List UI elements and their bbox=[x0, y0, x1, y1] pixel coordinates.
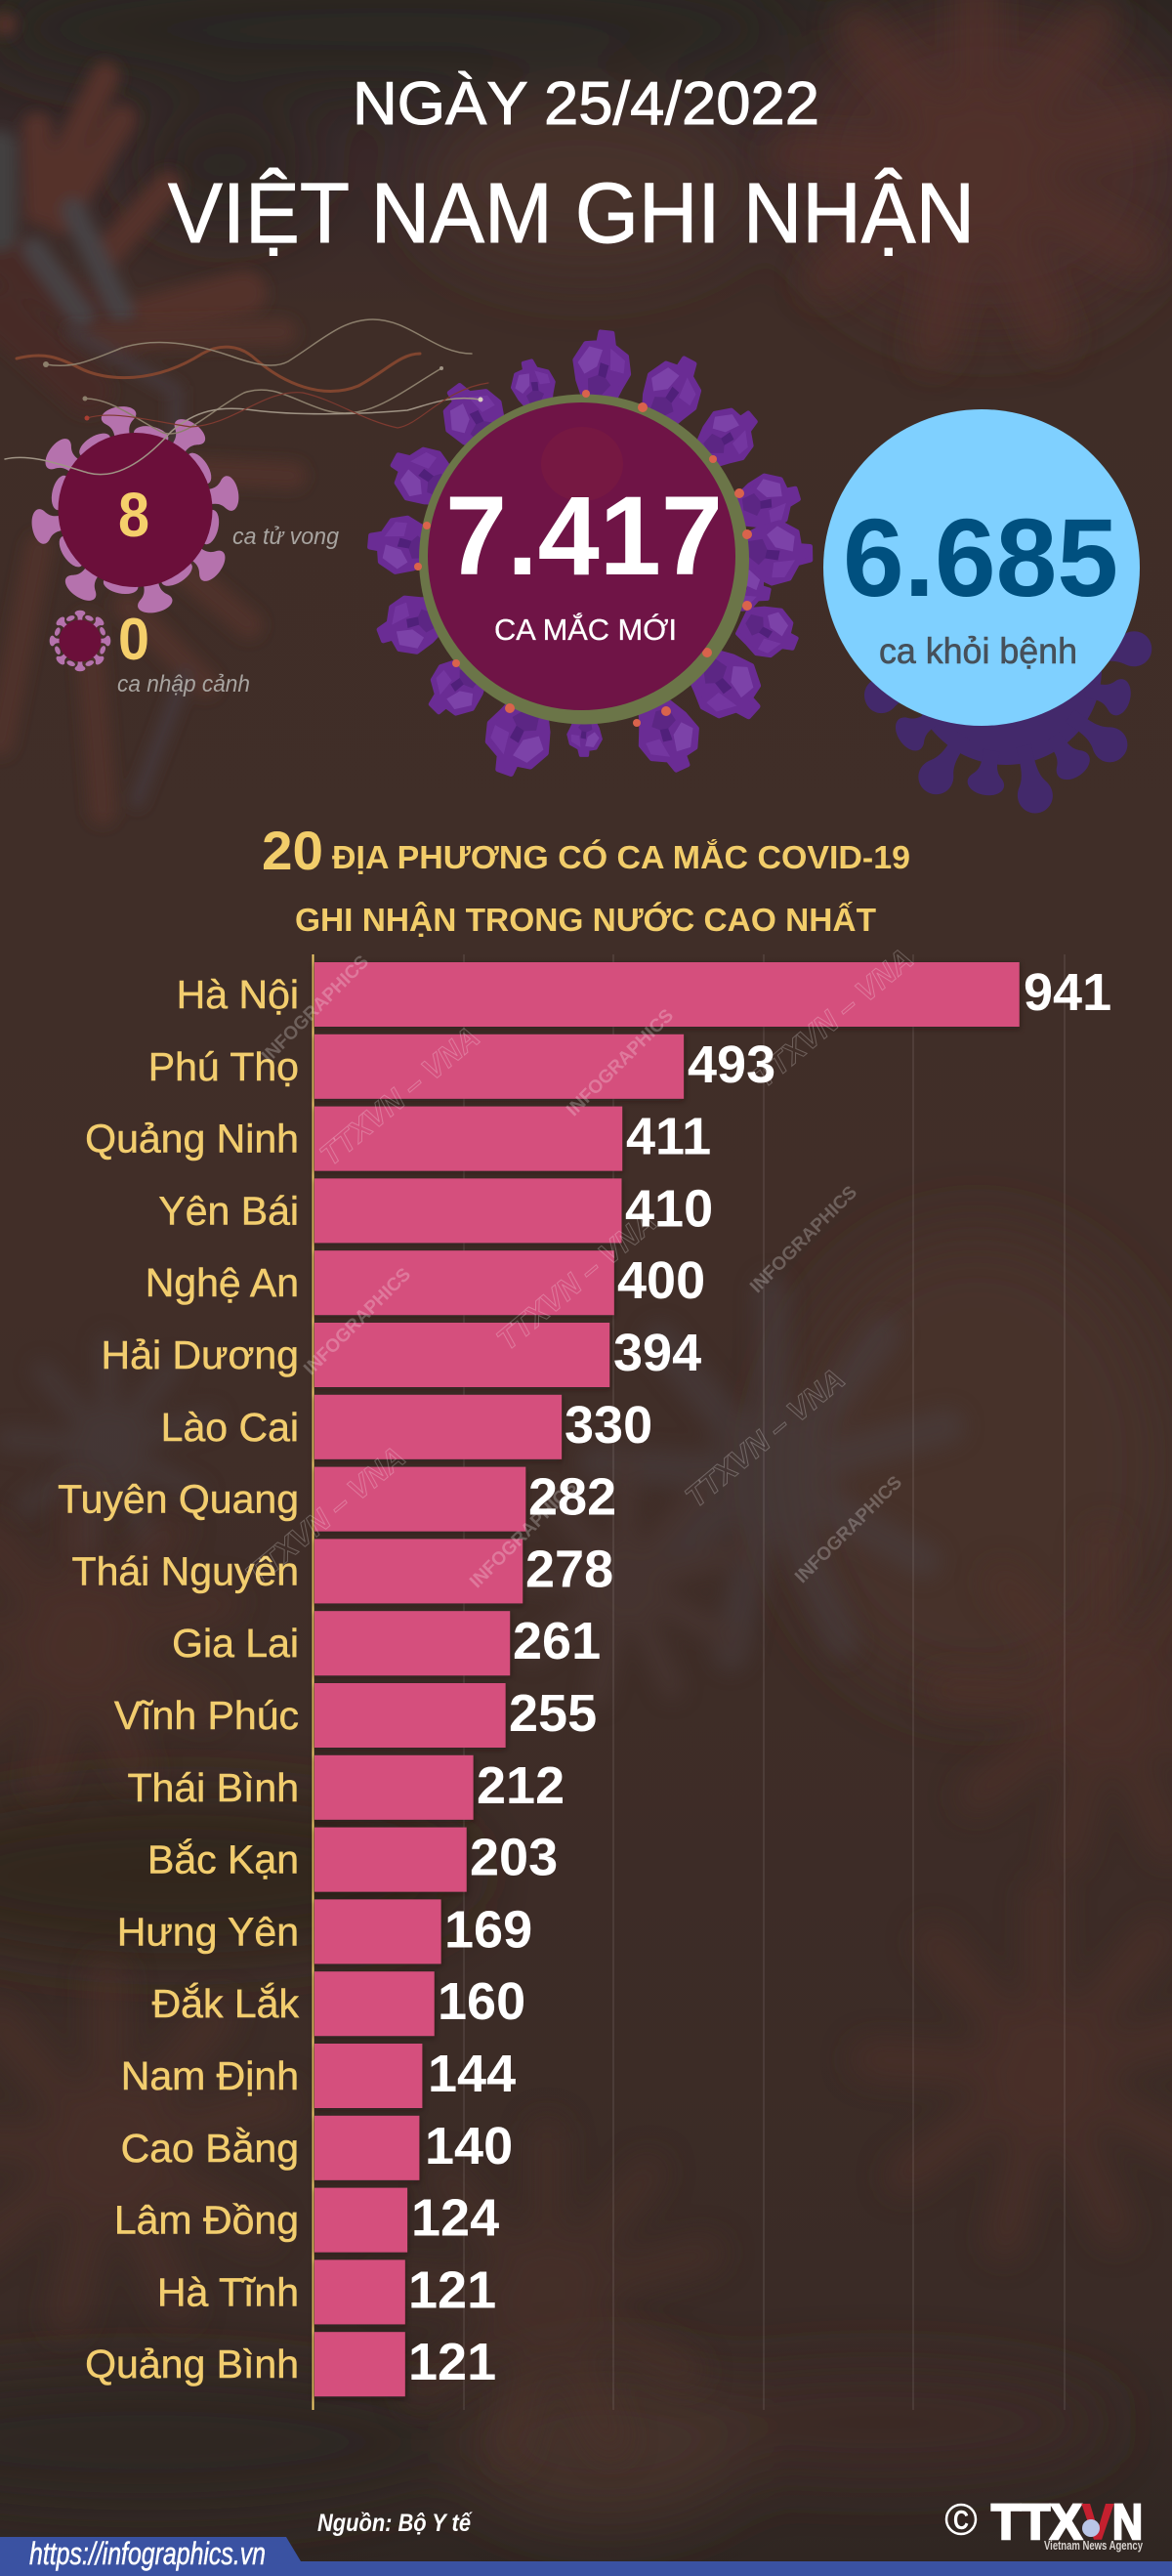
province labels bbox=[58, 972, 299, 2386]
axis bbox=[313, 954, 314, 2410]
province labels: Phú Thọ bbox=[148, 1044, 299, 1089]
watermarks: INFOGRAPHICS bbox=[258, 951, 373, 1067]
label: new cases: CA MẮC MỚI bbox=[494, 612, 677, 647]
chart heading: 20 bbox=[262, 820, 323, 881]
province labels: Tuyên Quang bbox=[58, 1477, 299, 1522]
value labels: 410 bbox=[625, 1179, 713, 1238]
province labels: Cao Bằng bbox=[121, 2126, 299, 2171]
watermarks: INFOGRAPHICS bbox=[300, 1264, 415, 1379]
watermarks: INFOGRAPHICS bbox=[563, 1005, 678, 1120]
watermarks: TTXVN – VNA bbox=[747, 942, 920, 1094]
watermarks: TTXVN – VNA bbox=[490, 1204, 663, 1357]
panel: new cases virus bbox=[368, 330, 811, 782]
logo: TTXVN: V bbox=[1082, 2494, 1113, 2550]
province labels: Bắc Kạn bbox=[147, 1837, 299, 1882]
number: recovered: 6.685 bbox=[843, 496, 1118, 619]
value labels: 330 bbox=[565, 1396, 652, 1455]
value labels: 121 bbox=[408, 2260, 496, 2319]
chart heading: GHI NHẬN TRONG NƯỚC CAO NHẤT bbox=[295, 902, 876, 938]
province labels: Yên Bái bbox=[158, 1188, 299, 1233]
logo: TTXVN bbox=[946, 2494, 1144, 2553]
decorative virus strands bbox=[5, 319, 488, 475]
label: imported: ca nhập cảnh bbox=[117, 671, 250, 697]
watermarks: TTXVN – VNA bbox=[314, 1020, 486, 1172]
blurred virus: centre bbox=[5, 1291, 947, 1696]
province labels: Hà Nội bbox=[177, 972, 299, 1017]
value labels: 144 bbox=[428, 2045, 516, 2103]
province labels: Nam Định bbox=[121, 2053, 299, 2098]
watermarks: INFOGRAPHICS bbox=[466, 1477, 581, 1592]
value labels: 261 bbox=[513, 1612, 601, 1670]
icon: virus imported cases bbox=[50, 611, 110, 671]
province labels: Hà Tĩnh bbox=[157, 2269, 299, 2314]
logo: TTXVN: N bbox=[1112, 2494, 1143, 2550]
province labels: Gia Lai bbox=[172, 1621, 299, 1666]
province labels: Thái Nguyên bbox=[72, 1548, 299, 1593]
value labels: 140 bbox=[425, 2117, 513, 2175]
label: recovered: ca khỏi bệnh bbox=[879, 631, 1077, 671]
icon: purple spike proteins bbox=[368, 330, 811, 782]
label: deaths: ca tử vong bbox=[232, 524, 340, 550]
value labels: 255 bbox=[509, 1684, 597, 1743]
blurred virus: left bbox=[0, 332, 293, 811]
province labels: Hưng Yên bbox=[117, 1909, 299, 1954]
watermarks: TTXVN – VNA bbox=[239, 1440, 412, 1592]
value labels: 278 bbox=[525, 1540, 613, 1598]
website link: https://infographics.vn bbox=[29, 2536, 266, 2571]
logo: TTXVN: C bbox=[953, 2505, 969, 2535]
title: headline: VIỆT NAM GHI NHẬN bbox=[168, 166, 975, 261]
logo: TTXVN: TTX bbox=[991, 2494, 1082, 2550]
watermarks: INFOGRAPHICS bbox=[746, 1182, 861, 1297]
blurred virus: top-right bbox=[786, 0, 1167, 351]
value labels: 203 bbox=[470, 1829, 558, 1887]
value labels: 941 bbox=[1024, 963, 1111, 1022]
source note: Nguồn: Bộ Y tế bbox=[317, 2510, 473, 2537]
value labels: 169 bbox=[444, 1900, 532, 1959]
value labels: 121 bbox=[408, 2333, 496, 2391]
province labels: Lâm Đồng bbox=[114, 2198, 299, 2243]
bar chart bbox=[58, 942, 1111, 2410]
title: date: NGÀY 25/4/2022 bbox=[353, 70, 819, 138]
bars bbox=[314, 962, 1020, 2396]
province labels: Quảng Ninh bbox=[85, 1117, 299, 1161]
province labels: Hải Dương bbox=[102, 1332, 299, 1377]
value labels: 212 bbox=[477, 1756, 565, 1815]
watermarks: INFOGRAPHICS bbox=[791, 1472, 906, 1587]
value labels: 400 bbox=[617, 1251, 705, 1310]
blurred virus: top-left bbox=[0, 13, 244, 391]
blurred viruses: lower bbox=[0, 1495, 1172, 2452]
panel: recovered cases bbox=[823, 409, 1140, 726]
number: new cases: 7.417 bbox=[445, 474, 723, 599]
number: imported: 0 bbox=[118, 607, 149, 672]
footer band bbox=[0, 2536, 1172, 2576]
value labels: 411 bbox=[626, 1108, 711, 1166]
province labels: Nghệ An bbox=[146, 1260, 299, 1305]
province labels: Vĩnh Phúc bbox=[114, 1693, 299, 1738]
province labels: Thái Bình bbox=[127, 1765, 299, 1810]
icon: purple virus behind recovered circle bbox=[861, 573, 1154, 817]
icon: virus deaths bbox=[29, 403, 241, 615]
chart heading bbox=[262, 820, 910, 938]
chart heading: ĐỊA PHƯƠNG CÓ CA MẮC COVID-19 bbox=[332, 839, 910, 875]
watermarks bbox=[239, 942, 920, 1592]
value labels: 493 bbox=[688, 1035, 775, 1094]
province labels: Quảng Bình bbox=[85, 2342, 299, 2386]
value labels: 282 bbox=[528, 1468, 616, 1527]
value labels: 160 bbox=[438, 1972, 525, 2031]
value labels: 124 bbox=[411, 2189, 499, 2248]
value labels: 394 bbox=[613, 1324, 701, 1382]
watermarks: TTXVN – VNA bbox=[679, 1362, 852, 1514]
value labels bbox=[408, 963, 1111, 2391]
province labels: Lào Cai bbox=[161, 1405, 299, 1450]
number: deaths: 8 bbox=[118, 480, 149, 550]
province labels: Đắk Lắk bbox=[152, 1981, 299, 2026]
